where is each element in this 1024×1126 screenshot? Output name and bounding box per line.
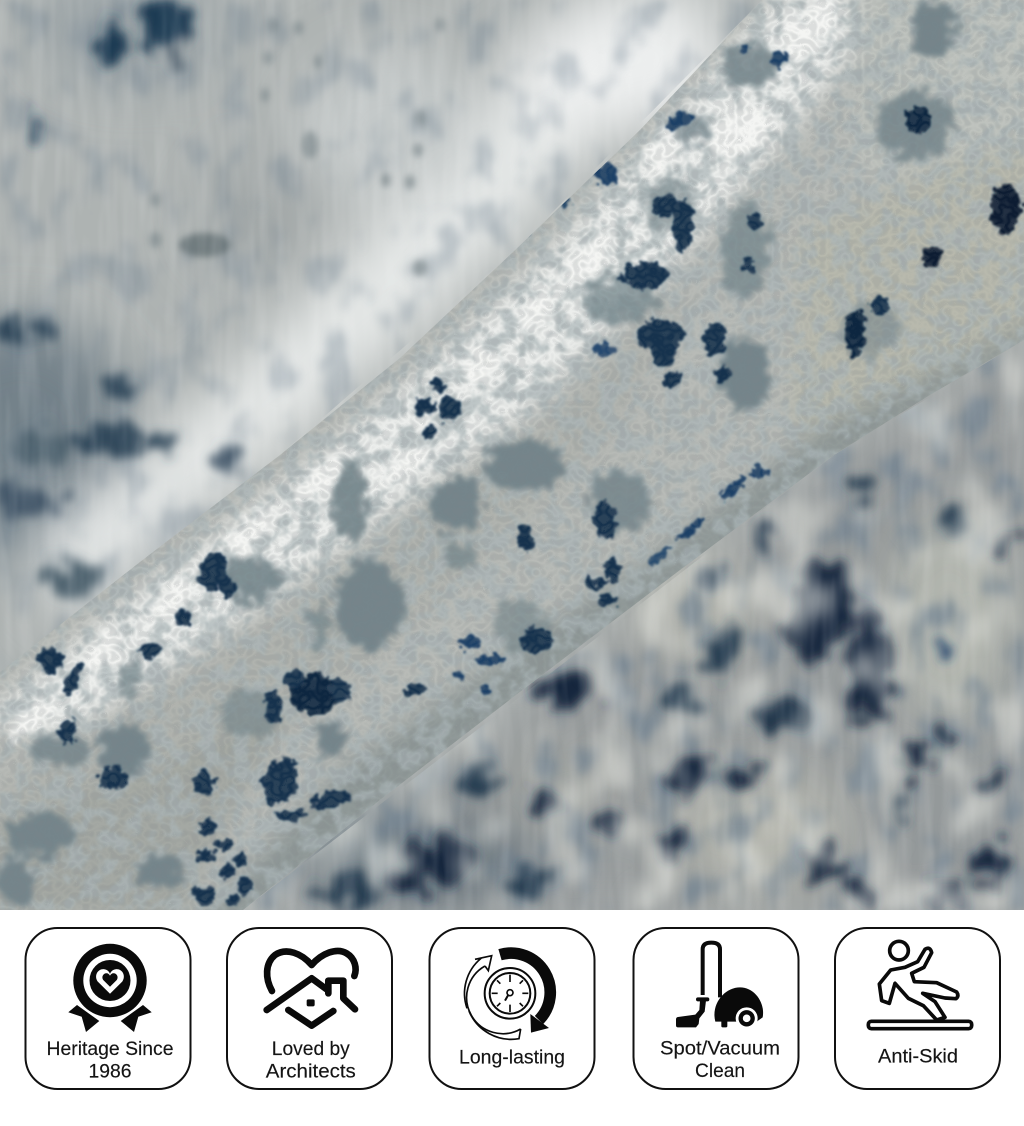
background rug: lower right, out of focus [254, 344, 1024, 910]
grey-blue motif patches [0, 0, 955, 906]
label [46, 1038, 174, 1082]
icon: heart with house [267, 951, 356, 1026]
label: Long-lasting [459, 1046, 565, 1068]
badge: long-lasting [430, 928, 594, 1089]
panel: feature badges [0, 910, 1024, 1126]
badge: loved by architects [227, 928, 392, 1089]
badge: heritage since 1986 [26, 928, 190, 1089]
icon: vacuum cleaner [676, 943, 763, 1029]
label: Clean [695, 1060, 745, 1082]
icon: slipping person [868, 941, 972, 1029]
label: Spot/Vacuum [660, 1038, 780, 1060]
label: Heritage Since [46, 1038, 174, 1060]
background rug: upper left, out of focus [0, 0, 752, 626]
badge: anti-skid [835, 928, 1000, 1089]
navy knots [37, 43, 1022, 906]
badge: spot and vacuum clean [634, 928, 798, 1089]
label: 1986 [88, 1060, 132, 1082]
icon: clock with circular arrows [465, 953, 550, 1039]
icon: medal with heart [68, 944, 152, 1032]
label [660, 1038, 780, 1082]
label [266, 1038, 356, 1082]
label: Anti-Skid [878, 1046, 958, 1068]
label: Architects [266, 1060, 356, 1082]
white highlights [1, 0, 848, 747]
label: Loved by [272, 1038, 350, 1060]
